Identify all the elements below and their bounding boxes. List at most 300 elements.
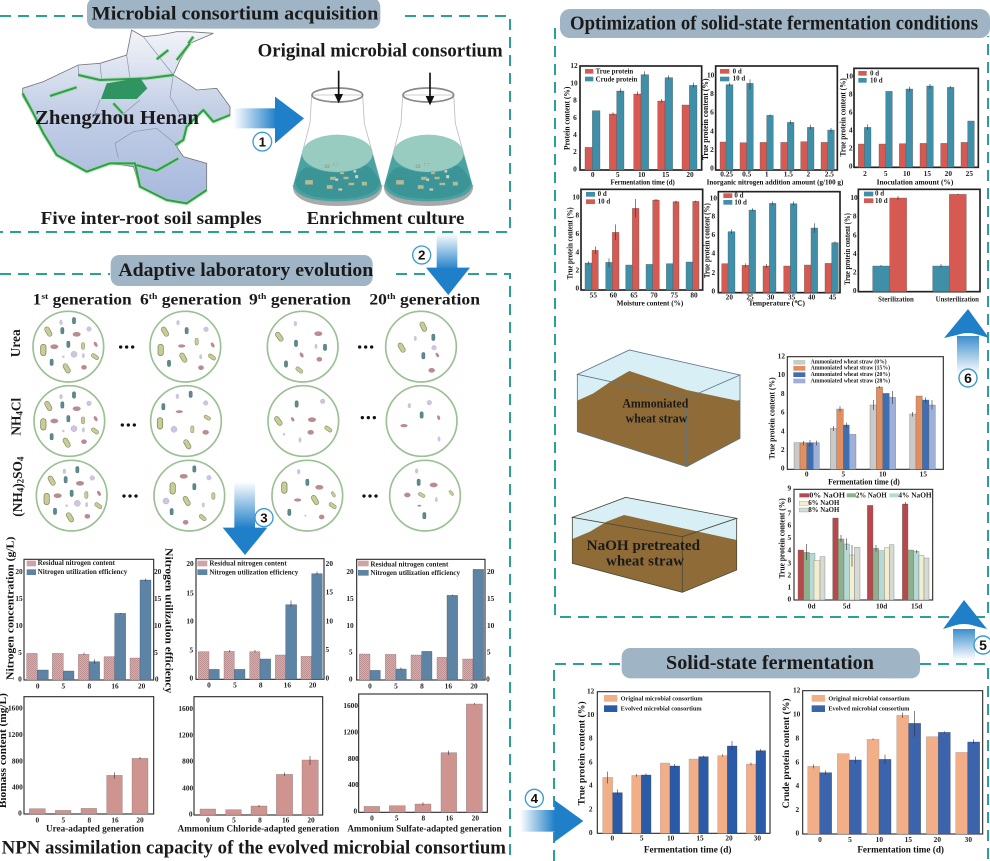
heading: microbial consortium acquisition bbox=[87, 0, 380, 29]
arrow 1 bbox=[233, 97, 304, 151]
chart: ammonium chloride biomass: 16 bbox=[282, 816, 290, 825]
chart: moisture content: 80 bbox=[690, 291, 698, 300]
chart: ammonium sulfate biomass: 0 bbox=[353, 807, 357, 816]
chart: temperature: 10 bbox=[710, 193, 717, 202]
heading: adaptive laboratory evolution bbox=[111, 255, 374, 286]
illustration: ammoniated wheat straw box: Ammoniated bbox=[622, 396, 688, 410]
chart: temperature: 20 bbox=[726, 292, 733, 301]
heading: optimization of solid-state fermentation conditions: Optimization of solid-state fermentation conditions bbox=[570, 14, 978, 34]
chart: temperature: 30 bbox=[767, 292, 775, 301]
generation labels: generation bbox=[266, 291, 351, 308]
label: enrichment culture: Enrichment culture bbox=[307, 208, 464, 228]
arrow 2: 2 bbox=[418, 248, 425, 263]
chart: temperature bbox=[702, 191, 840, 307]
chart: inorganic nitrogen addition: 0.5 bbox=[742, 169, 752, 178]
chart: moisture content: Moisture content (%) bbox=[617, 299, 684, 307]
chart: true protein content bbox=[576, 687, 770, 855]
heading: solid-state fermentation: Solid-state fermentation bbox=[666, 652, 874, 674]
chart: ammonium sulfate nitrogen: 5 bbox=[349, 648, 353, 657]
chart: sterilization: Unsterilization bbox=[936, 294, 979, 303]
arrow 5 bbox=[943, 600, 990, 660]
chart: inorganic nitrogen addition: 0 d bbox=[733, 67, 742, 75]
chart: urea nitrogen bbox=[5, 537, 174, 693]
chart: ammonium sulfate nitrogen: 5 bbox=[487, 648, 491, 657]
chart: ammoniated wheat straw protein: 2 bbox=[781, 445, 785, 454]
chart: crude protein content: Fermentation time (d) bbox=[857, 844, 944, 855]
chart: ammonium sulfate nitrogen: Residual nitrogen content bbox=[370, 560, 449, 568]
chart: urea biomass: 0 bbox=[18, 809, 22, 818]
chart: ammoniated wheat straw protein: 12 bbox=[778, 352, 785, 361]
chart: ammonium chloride nitrogen: 0 bbox=[207, 681, 211, 690]
chart: NaOH wheat straw protein: 2% NaOH bbox=[856, 490, 887, 499]
illustration: NaOH pretreated wheat straw box: wheat straw bbox=[606, 554, 684, 570]
chart: moisture content: 0 bbox=[575, 284, 579, 293]
heading: NPN assimilation capacity: NPN assimilation capacity of the evolved microbial consortium bbox=[2, 838, 506, 859]
chart: NaOH wheat straw protein: 10d bbox=[876, 602, 887, 611]
chart: ammonium chloride biomass: 1200 bbox=[178, 730, 193, 739]
chart: crude protein content: 10 bbox=[793, 709, 801, 718]
chart: temperature: 6 bbox=[711, 230, 715, 239]
chart: ammonium sulfate biomass: 0 bbox=[370, 813, 374, 822]
chart: urea nitrogen: 0 bbox=[155, 675, 159, 684]
chart: temperature: 8 bbox=[711, 212, 715, 221]
icon: flask left bbox=[293, 71, 382, 206]
chart: ammonium chloride biomass: 400 bbox=[182, 783, 193, 792]
chart: ammonium chloride nitrogen: 8 bbox=[259, 681, 263, 690]
chart: inoculation amount: 8 bbox=[849, 90, 853, 99]
label: Zhengzhou Henan: Zhengzhou Henan bbox=[35, 107, 199, 129]
chart: sterilization bbox=[843, 189, 980, 303]
chart: true protein content: 10 bbox=[667, 834, 675, 843]
row label: (NH4)2SO4: 4 bbox=[16, 487, 26, 492]
chart: moisture content: 0 d bbox=[598, 190, 607, 198]
chart: fermentation time protein: True protein bbox=[596, 68, 633, 76]
panel: microbial consortium acquisition bbox=[0, 0, 510, 232]
row label: NH4Cl: Cl bbox=[9, 397, 24, 411]
arrow 2 bbox=[413, 233, 470, 295]
row label: NH4Cl: NH bbox=[9, 416, 24, 436]
chart: ammonium chloride nitrogen bbox=[186, 559, 333, 690]
panel: solid-state fermentation bbox=[520, 648, 988, 861]
chart: ammonium chloride biomass: 8 bbox=[258, 816, 262, 825]
chart: ammonium sulfate biomass: 400 bbox=[348, 780, 359, 789]
generation labels: 9 bbox=[249, 291, 257, 308]
row label: (NH4)2SO4: 2 bbox=[16, 478, 26, 483]
chart: temperature: 45 bbox=[829, 292, 837, 301]
chart: NaOH wheat straw protein: 0% NaOH bbox=[809, 490, 845, 499]
chart: NaOH wheat straw protein: 0 bbox=[787, 594, 791, 603]
chart: temperature: 0 bbox=[711, 287, 715, 296]
chart: ammonium chloride nitrogen: 20 bbox=[326, 559, 333, 568]
chart: ammonium chloride biomass bbox=[178, 697, 339, 833]
chart: urea nitrogen: 20 bbox=[154, 567, 162, 576]
illustration: NaOH pretreated wheat straw box: NaOH pretreated bbox=[587, 538, 700, 554]
chart: fermentation time protein: 2 bbox=[573, 147, 577, 156]
chart: inorganic nitrogen addition bbox=[701, 66, 844, 186]
chart: true protein content: 10 bbox=[587, 710, 595, 719]
chart: urea biomass: 20 bbox=[136, 816, 144, 825]
chart: crude protein content: 10 bbox=[876, 835, 883, 844]
chart: NaOH wheat straw protein: 4 bbox=[787, 546, 791, 555]
chart: ammoniated wheat straw protein: Ammoniated wheat straw (20%) bbox=[811, 371, 890, 378]
illustration: ammoniated wheat straw box bbox=[577, 350, 740, 467]
chart: NaOH wheat straw protein: 4% NaOH bbox=[898, 490, 932, 499]
chart: ammonium chloride biomass: 0 bbox=[206, 816, 210, 825]
generation labels: th bbox=[258, 291, 267, 301]
chart: NaOH wheat straw protein bbox=[777, 484, 933, 611]
microbes: later generation dishes bbox=[157, 320, 454, 525]
chart: crude protein content: 15 bbox=[905, 835, 912, 844]
chart: urea biomass: 0 bbox=[35, 816, 39, 825]
chart: moisture content: 2 bbox=[575, 266, 579, 275]
arrow 3: 3 bbox=[260, 510, 268, 525]
chart: urea nitrogen: 5 bbox=[61, 682, 65, 691]
chart: urea nitrogen: 5 bbox=[154, 648, 158, 657]
chart: inoculation amount: 10 d bbox=[870, 76, 883, 84]
chart: ammonium sulfate nitrogen: 0 bbox=[368, 682, 372, 691]
chart: inorganic nitrogen addition: 2 bbox=[710, 145, 714, 154]
chart: moisture content: 65 bbox=[630, 291, 638, 300]
chart: ammonium sulfate biomass: 5 bbox=[395, 813, 399, 822]
chart: crude protein content: 30 bbox=[965, 835, 972, 844]
chart: moisture content bbox=[566, 189, 703, 307]
generation labels: th bbox=[387, 291, 396, 301]
chart: inoculation amount: 0 d bbox=[870, 69, 879, 77]
chart: ammonium sulfate biomass: 16 bbox=[446, 813, 453, 822]
chart: urea biomass: 400 bbox=[12, 783, 23, 792]
chart: ammonium sulfate nitrogen: 8 bbox=[420, 682, 424, 691]
chart: NaOH wheat straw protein: 5 bbox=[787, 533, 791, 542]
chart: ammonium chloride biomass: 5 bbox=[232, 816, 236, 825]
chart: urea nitrogen: 20 bbox=[138, 682, 146, 691]
chart: moisture content: 75 bbox=[671, 291, 678, 300]
chart: sterilization: 0 d bbox=[875, 190, 884, 198]
arrow 6 bbox=[944, 309, 989, 387]
chart: moisture content: 70 bbox=[650, 291, 658, 300]
chart: fermentation time protein: 10 bbox=[638, 170, 646, 179]
chart: crude protein content: Evolved microbial consortium bbox=[828, 705, 910, 712]
chart: urea nitrogen: 0 bbox=[18, 675, 22, 684]
chart: inoculation amount bbox=[838, 68, 978, 186]
chart: NaOH wheat straw protein: 7 bbox=[787, 508, 791, 517]
chart: inorganic nitrogen addition: 2.5 bbox=[825, 169, 834, 178]
chart: temperature: Temperature (℃) bbox=[748, 299, 806, 307]
chart: temperature: 35 bbox=[788, 292, 796, 301]
chart: temperature: True protein content (%) bbox=[702, 203, 711, 278]
chart: crude protein content: 12 bbox=[793, 686, 801, 695]
chart: sterilization: 6 bbox=[853, 230, 857, 239]
chart: ammoniated wheat straw protein: Ammoniated wheat straw (0%) bbox=[811, 358, 887, 365]
chart: ammonium chloride biomass: Ammonium Chloride-adapted generation bbox=[178, 823, 339, 833]
chart: ammonium chloride nitrogen: 20 bbox=[309, 681, 317, 690]
chart: sterilization: 8 bbox=[853, 212, 857, 221]
chart: urea biomass: 16 bbox=[111, 816, 119, 825]
chart: ammoniated wheat straw protein: True protein content (%) bbox=[767, 377, 776, 459]
generation labels bbox=[33, 291, 480, 308]
chart: temperature: 10 d bbox=[734, 199, 747, 207]
illustration: ammoniated wheat straw box: wheat straw bbox=[626, 412, 687, 426]
chart: fermentation time protein: 12 bbox=[570, 61, 578, 70]
chart: temperature: 2 bbox=[711, 268, 715, 277]
chart: NaOH wheat straw protein: 0d bbox=[808, 602, 816, 611]
row label: NH4Cl: 4 bbox=[14, 411, 24, 416]
chart: crude protein content: 4 bbox=[795, 781, 799, 790]
chart: inoculation amount: 4 bbox=[849, 126, 853, 135]
arrow 6: 6 bbox=[964, 370, 972, 386]
chart: true protein content: 15 bbox=[696, 834, 704, 843]
chart: inoculation amount: 6 bbox=[849, 108, 853, 117]
chart: inoculation amount: 5 bbox=[884, 169, 888, 178]
chart: NaOH wheat straw protein: 8 bbox=[787, 496, 791, 505]
arrow 3 bbox=[223, 482, 273, 555]
row label: (NH4)2SO4: (NH bbox=[10, 492, 25, 517]
chart: inoculation amount: 2 bbox=[849, 144, 853, 153]
chart: urea biomass: 1600 bbox=[8, 704, 23, 713]
chart: inoculation amount: 20 bbox=[945, 169, 952, 178]
chart: crude protein content: 8 bbox=[795, 733, 799, 742]
chart: true protein content: 8 bbox=[589, 734, 593, 743]
chart: ammonium sulfate biomass: 1200 bbox=[343, 728, 358, 737]
chart: true protein content: 5 bbox=[640, 834, 644, 843]
heading: microbial consortium acquisition: Microbial consortium acquisition bbox=[92, 4, 379, 25]
chart: ammoniated wheat straw protein bbox=[767, 352, 943, 487]
chart: fermentation time protein: Fermentation time (d) bbox=[610, 178, 675, 186]
chart: crude protein content: 0 bbox=[795, 828, 799, 837]
chart: ammonium chloride nitrogen: 0 bbox=[325, 673, 329, 682]
chart: crude protein content bbox=[781, 686, 983, 855]
chart: urea nitrogen: 0 bbox=[36, 682, 40, 691]
chart: true protein content: 6 bbox=[589, 757, 593, 766]
chart: ammonium chloride nitrogen: 15 bbox=[326, 588, 333, 597]
chart: true protein content: Fermentation time (d) bbox=[644, 844, 731, 855]
chart: ammoniated wheat straw protein: 5 bbox=[841, 469, 845, 478]
generation labels: th bbox=[149, 291, 158, 301]
panel: NPN assimilation charts bbox=[0, 537, 506, 859]
chart: crude protein content: Crude protein content (%) bbox=[781, 698, 792, 808]
panel: adaptive laboratory evolution bbox=[0, 255, 510, 861]
chart: ammonium sulfate biomass: 1600 bbox=[343, 701, 358, 710]
chart: inorganic nitrogen addition: 1 bbox=[765, 169, 769, 178]
chart: ammoniated wheat straw protein: Ammoniated wheat straw (15%) bbox=[811, 365, 890, 372]
chart: NaOH wheat straw protein: 8% NaOH bbox=[808, 505, 840, 514]
chart: fermentation time protein: 0 bbox=[591, 170, 595, 179]
chart: ammonium chloride nitrogen: Residual nitrogen content bbox=[209, 560, 287, 568]
chart: inoculation amount: 10 bbox=[846, 72, 853, 81]
chart: inoculation amount: 25 bbox=[966, 169, 973, 178]
chart: ammoniated wheat straw protein: 0 bbox=[805, 469, 809, 478]
chart: NaOH wheat straw protein: 3 bbox=[787, 558, 791, 567]
chart: fermentation time protein: 10 bbox=[570, 78, 578, 87]
generation labels: 20 bbox=[369, 291, 385, 308]
arrow 4: 4 bbox=[531, 791, 539, 806]
chart: inorganic nitrogen addition: 8 bbox=[710, 89, 714, 98]
chart: fermentation time protein: 5 bbox=[616, 170, 620, 179]
chart: inorganic nitrogen addition: 0 bbox=[710, 163, 714, 172]
row label: (NH4)2SO4: ) bbox=[10, 483, 25, 488]
arrow 4 bbox=[520, 789, 583, 842]
chart: moisture content: 60 bbox=[610, 291, 617, 300]
chart: sterilization: 10 bbox=[850, 193, 858, 202]
chart: temperature: 40 bbox=[808, 292, 816, 301]
heading: adaptive laboratory evolution: Adaptive laboratory evolution bbox=[118, 260, 374, 281]
chart: inoculation amount: 15 bbox=[924, 169, 931, 178]
chart: moisture content: True protein content (%) bbox=[566, 207, 575, 279]
chart: inorganic nitrogen addition: 6 bbox=[710, 108, 714, 117]
chart: inorganic nitrogen addition: 10 d bbox=[733, 75, 745, 83]
chart: ammonium sulfate nitrogen: 0 bbox=[486, 674, 490, 683]
chart: ammoniated wheat straw protein: Fermentation time (d) bbox=[828, 478, 900, 487]
chart: inorganic nitrogen addition: 1.5 bbox=[784, 169, 793, 178]
chart: ammonium sulfate nitrogen: 0 bbox=[349, 674, 353, 683]
chart: fermentation time protein: 6 bbox=[573, 113, 577, 122]
heading: solid-state fermentation bbox=[622, 648, 920, 678]
chart: true protein content: Evolved microbial consortium bbox=[621, 705, 702, 712]
chart: ammonium sulfate nitrogen: 20 bbox=[470, 682, 478, 691]
chart: ammonium sulfate nitrogen: 10 bbox=[346, 621, 354, 630]
chart: fermentation time protein: 15 bbox=[662, 170, 670, 179]
generation labels: generation bbox=[396, 291, 480, 308]
chart: true protein content: 4 bbox=[589, 781, 593, 790]
chart: true protein content: 12 bbox=[587, 687, 595, 696]
chart: ammonium chloride biomass: 800 bbox=[182, 757, 193, 766]
ellipsis markers bbox=[119, 345, 378, 498]
chart: crude protein content: 6 bbox=[795, 757, 799, 766]
chart: ammonium chloride nitrogen: 20 bbox=[186, 559, 194, 568]
chart: ammonium sulfate nitrogen: 10 bbox=[487, 621, 495, 630]
chart: crude protein content: 5 bbox=[848, 835, 852, 844]
chart: ammoniated wheat straw protein: 0 bbox=[781, 464, 785, 473]
chart: ammonium sulfate biomass bbox=[343, 694, 502, 833]
generation labels: generation bbox=[157, 291, 242, 308]
generation labels: 6 bbox=[140, 291, 148, 308]
chart: inorganic nitrogen addition: 4 bbox=[710, 127, 714, 136]
chart: ammonium chloride nitrogen: 10 bbox=[326, 616, 333, 625]
chart: ammonium sulfate nitrogen: 15 bbox=[487, 594, 495, 603]
chart: ammonium sulfate nitrogen: 16 bbox=[445, 682, 452, 691]
chart: temperature: 0 d bbox=[734, 191, 744, 199]
chart: ammonium sulfate biomass: Ammonium Sulfate-adapted generation bbox=[347, 823, 502, 833]
chart: inorganic nitrogen addition: 0.25 bbox=[720, 169, 733, 178]
chart: ammoniated wheat straw protein: 10 bbox=[879, 469, 887, 478]
microbes: first generation dishes bbox=[41, 317, 103, 523]
arrow 1: 1 bbox=[259, 134, 267, 149]
chart: moisture content: 8 bbox=[575, 211, 579, 220]
chart: ammoniated wheat straw protein: Ammoniated wheat straw (28%) bbox=[811, 378, 890, 385]
chart: ammonium chloride nitrogen: 15 bbox=[186, 588, 194, 597]
chart: fermentation time protein: Crude protein bbox=[596, 75, 637, 83]
chart: true protein content: 0 bbox=[610, 834, 614, 843]
chart: NaOH wheat straw protein: 5d bbox=[843, 602, 851, 611]
chart: urea nitrogen: 10 bbox=[15, 621, 23, 630]
generation labels: st bbox=[41, 291, 48, 301]
chart: ammonium chloride biomass: 1600 bbox=[178, 704, 193, 713]
chart: ammonium sulfate biomass: 8 bbox=[421, 813, 425, 822]
icon: flask right bbox=[384, 73, 473, 206]
chart: ammonium sulfate nitrogen bbox=[346, 559, 495, 691]
chart: NaOH wheat straw protein: 15d bbox=[911, 602, 922, 611]
chart: ammonium chloride nitrogen: Nitrogen utilization efficiency bbox=[209, 568, 299, 576]
chart: true protein content: Original microbial consortium bbox=[621, 695, 703, 702]
chart: NaOH wheat straw protein: 6% NaOH bbox=[808, 498, 840, 507]
chart: NaOH wheat straw protein: 9 bbox=[787, 484, 791, 493]
chart: inoculation amount: 0 bbox=[849, 162, 853, 171]
chart: crude protein content: 2 bbox=[795, 805, 799, 814]
chart: fermentation time protein: 4 bbox=[573, 130, 577, 139]
petri dish grid bbox=[33, 311, 460, 531]
chart: ammonium chloride biomass: 0 bbox=[189, 810, 193, 819]
generation labels: 1 bbox=[33, 291, 40, 308]
chart: true protein content: True protein content (%) bbox=[576, 701, 587, 805]
chart: true protein content: 2 bbox=[589, 804, 593, 813]
chart: urea biomass bbox=[0, 693, 154, 833]
chart: urea nitrogen: Nitrogen concentration (g/L) bbox=[5, 537, 16, 680]
chart: NaOH wheat straw protein: True protein content (%) bbox=[777, 498, 786, 578]
chart: moisture content: 4 bbox=[575, 248, 579, 257]
chart: ammonium chloride nitrogen: 0 bbox=[189, 673, 193, 682]
chart: urea nitrogen: Nitrogen utilization efficiency bbox=[163, 548, 174, 693]
chart: ammonium sulfate biomass: 800 bbox=[348, 754, 359, 763]
chart: true protein content: 0 bbox=[589, 828, 593, 837]
chart: fermentation time protein: 8 bbox=[573, 96, 577, 105]
chart: ammonium sulfate nitrogen: 5 bbox=[394, 682, 398, 691]
panel: optimization of solid-state fermentation conditions bbox=[555, 9, 990, 617]
chart: urea nitrogen: 15 bbox=[154, 594, 162, 603]
chart: urea nitrogen: Residual nitrogen content bbox=[38, 559, 116, 567]
arrow 5: 5 bbox=[979, 637, 987, 653]
chart: inorganic nitrogen addition: Inorganic nitrogen addition amount (g/100 g) bbox=[707, 178, 844, 186]
chart: urea nitrogen: 5 bbox=[18, 648, 22, 657]
chart: sterilization: 0 bbox=[853, 286, 857, 295]
row label: Urea: Urea bbox=[8, 329, 23, 357]
chart: sterilization: 2 bbox=[853, 268, 857, 277]
chart: ammonium sulfate nitrogen: 20 bbox=[487, 567, 495, 576]
chart: urea nitrogen: 10 bbox=[154, 621, 162, 630]
chart: ammoniated wheat straw protein: 10 bbox=[778, 370, 785, 379]
chart: sterilization: True protein content (%) bbox=[843, 213, 852, 285]
chart: moisture content: 10 d bbox=[598, 197, 610, 205]
chart: ammonium chloride nitrogen: 10 bbox=[186, 617, 194, 626]
chart: sterilization: Sterilization bbox=[878, 294, 914, 303]
chart: fermentation time protein: Protein content (%) bbox=[562, 86, 571, 150]
chart: ammonium chloride nitrogen: 5 bbox=[325, 645, 329, 654]
chart: inorganic nitrogen addition: 2 bbox=[806, 169, 810, 178]
chart: urea nitrogen: 16 bbox=[111, 682, 119, 691]
chart: NaOH wheat straw protein: 6 bbox=[787, 521, 791, 530]
chart: urea biomass: 5 bbox=[61, 816, 65, 825]
chart: true protein content: 30 bbox=[754, 834, 761, 843]
chart: inoculation amount: 10 bbox=[903, 169, 911, 178]
chart: urea nitrogen: 20 bbox=[15, 567, 23, 576]
chart: inoculation amount: Inoculation amount (%) bbox=[877, 178, 954, 186]
chart: urea biomass: 8 bbox=[87, 816, 91, 825]
chart: true protein content: 20 bbox=[725, 834, 733, 843]
chart: ammoniated wheat straw protein: 6 bbox=[781, 408, 785, 417]
chart: temperature: 4 bbox=[711, 248, 715, 257]
chart: crude protein content: 0 bbox=[818, 835, 822, 844]
chart: NaOH wheat straw protein: 2 bbox=[787, 571, 791, 580]
chart: ammonium chloride nitrogen: 5 bbox=[189, 645, 193, 654]
chart: urea biomass: 1200 bbox=[8, 730, 23, 739]
illustration: NaOH pretreated wheat straw box bbox=[572, 497, 737, 592]
chart: ammonium chloride nitrogen: 16 bbox=[284, 681, 291, 690]
chart: ammoniated wheat straw protein: 8 bbox=[781, 389, 785, 398]
row label: (NH4)2SO4: SO bbox=[10, 461, 25, 479]
chart: inorganic nitrogen addition: True protein content (%) bbox=[701, 78, 710, 160]
chart: ammonium sulfate nitrogen: 15 bbox=[346, 594, 354, 603]
row label: (NH4)2SO4: 4 bbox=[16, 456, 26, 461]
chart: urea biomass: Urea-adapted generation bbox=[46, 823, 144, 833]
chart: fermentation time protein bbox=[562, 61, 702, 186]
